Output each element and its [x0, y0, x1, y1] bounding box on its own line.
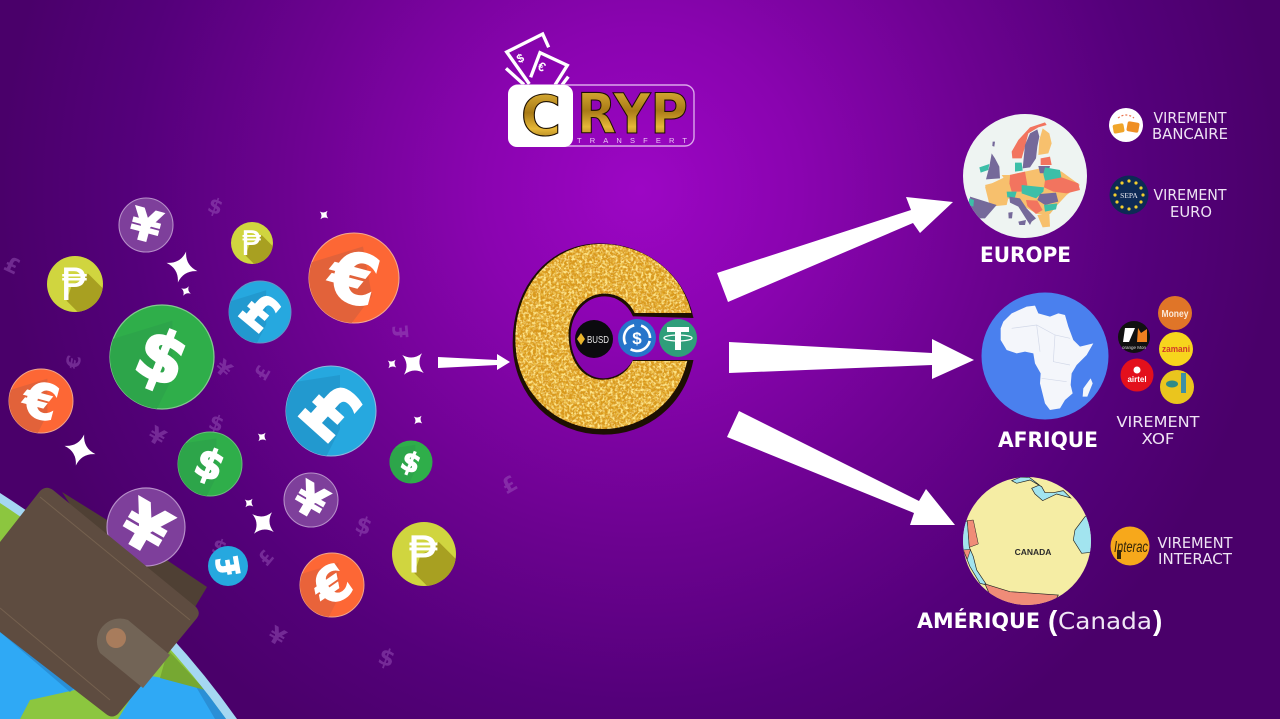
faint currency symbols: £ [0, 252, 24, 280]
logo white tile [508, 85, 573, 147]
logo letter C: C [521, 84, 561, 148]
wallet [0, 488, 199, 716]
coin: peso left [47, 256, 103, 312]
icon: airtel [1120, 358, 1154, 392]
heading: Amérique (Canada): AMÉRIQUE [917, 608, 1040, 634]
icon: money: Money [1162, 309, 1189, 320]
central gold C with stablecoins [513, 244, 697, 434]
coin: dollar small: $ [396, 445, 425, 481]
label: virement interact [1158, 534, 1233, 568]
faint currency symbols: $ [204, 193, 226, 220]
coin: dollar large [109, 304, 215, 410]
label: virement XOF [1116, 413, 1200, 448]
coin: pound small [208, 546, 248, 586]
coin: USDC: $ [632, 329, 642, 348]
icon: SEPA [1110, 176, 1148, 214]
icon: SEPA: SEPA [1120, 191, 1138, 200]
faint currency symbols: £ [497, 471, 522, 499]
faint currency symbols: $ [208, 534, 230, 561]
faint currency symbols: € [62, 354, 86, 371]
coin: dollar small [390, 440, 432, 484]
coin: euro large [308, 232, 400, 324]
icon: orange money [1118, 321, 1150, 353]
arrow: to Amérique [727, 411, 955, 525]
label: virement bancaire: VIREMENT [1154, 109, 1227, 127]
coin: pound large: £ [285, 365, 376, 459]
label: virement bancaire: BANCAIRE [1152, 125, 1228, 143]
coin: BUSD: BUSD [587, 334, 609, 346]
coin: euro left [8, 368, 74, 434]
heading: Amérique (Canada): Canada [1058, 609, 1152, 635]
map of Africa [982, 292, 1108, 420]
label: virement XOF: XOF [1142, 430, 1174, 448]
faint currency symbols: ¥ [143, 422, 170, 452]
map of Canada: CANADA [1015, 547, 1051, 557]
coin: BUSD [575, 320, 613, 358]
map of Canada [960, 477, 1097, 610]
icon: Interac: Interac [1114, 539, 1148, 556]
faint currency symbols: ¥ [263, 622, 290, 652]
logo letters RYP: RYP [577, 82, 688, 146]
coin: euro large: € [318, 235, 387, 324]
coin: peso large [392, 522, 456, 586]
heading: Europe: EUROPE [980, 243, 1071, 268]
coin: peso small: ₱ [241, 224, 263, 263]
coin: yen top: ¥ [125, 199, 167, 255]
panel: Afrique [982, 292, 1200, 453]
icon: virement bancaire [1109, 108, 1143, 142]
coin: pound small: £ [210, 552, 248, 579]
faint currency symbols: £ [254, 546, 279, 570]
coin: peso small [231, 222, 273, 264]
logo banknotes icon: $ [514, 50, 527, 66]
label: virement XOF: VIREMENT [1116, 413, 1200, 431]
faint currency symbols: ¥ [210, 355, 237, 383]
logo [506, 34, 694, 148]
coin: yen middle: ¥ [285, 472, 336, 531]
faint currency symbols: £ [250, 362, 276, 384]
wallet clasp [97, 619, 170, 688]
sparkle stars [60, 207, 433, 543]
icon: airtel: airtel [1127, 375, 1147, 384]
coin: peso left: ₱ [61, 258, 89, 311]
label: virement interact: VIREMENT [1158, 534, 1233, 552]
logo banknotes icon: € [536, 59, 548, 75]
coin: yen big: ¥ [108, 486, 182, 570]
coin: peso large: ₱ [408, 526, 440, 586]
faint currency symbols: $ [205, 410, 227, 437]
globe at bottom left [0, 490, 240, 719]
heading: Amérique (Canada) [917, 605, 1162, 636]
coin: euro bottom: € [302, 553, 363, 619]
arrow: to Afrique [729, 339, 974, 379]
faint currency symbols: $ [374, 643, 398, 673]
map of Europe [963, 114, 1087, 238]
coin: pound upper: £ [229, 281, 289, 345]
icon: orange money: orange Mon [1122, 345, 1146, 350]
icon: zamani [1159, 332, 1193, 366]
faint currency symbols [0, 193, 522, 673]
icon: Interac [1110, 526, 1150, 566]
arrow: to Europe [717, 197, 953, 302]
heading: Afrique: AFRIQUE [998, 428, 1098, 453]
coin: euro left: € [16, 371, 64, 434]
heading: Amérique (Canada): ( [1048, 605, 1058, 636]
panel: Amérique [917, 477, 1233, 636]
label: virement euro: EURO [1170, 203, 1212, 221]
icon: MTN [1160, 370, 1194, 404]
coin: dollar large: $ [125, 312, 199, 404]
label: virement interact: INTERACT [1158, 550, 1233, 568]
coin: dollar middle [178, 432, 242, 496]
coin: USDT [659, 319, 697, 357]
wallet back flap [62, 492, 207, 607]
icon: money [1158, 296, 1192, 330]
faint currency symbols: $ [351, 511, 375, 541]
arrow: coins to exchange [438, 354, 510, 370]
panel: Europe [963, 108, 1228, 268]
logo banknotes icon [506, 34, 568, 85]
logo frame [509, 85, 694, 146]
label: virement euro: VIREMENT [1154, 186, 1227, 204]
coin: dollar middle: $ [188, 439, 231, 491]
coin: USDC [618, 319, 656, 357]
faint currency symbols: £ [388, 323, 414, 340]
icon: zamani: zamani [1162, 344, 1190, 355]
logo subtitle: TRANSFERT [577, 136, 687, 145]
heading: Amérique (Canada): ) [1153, 605, 1162, 636]
label: virement bancaire [1152, 109, 1228, 143]
label: virement euro [1154, 186, 1227, 221]
